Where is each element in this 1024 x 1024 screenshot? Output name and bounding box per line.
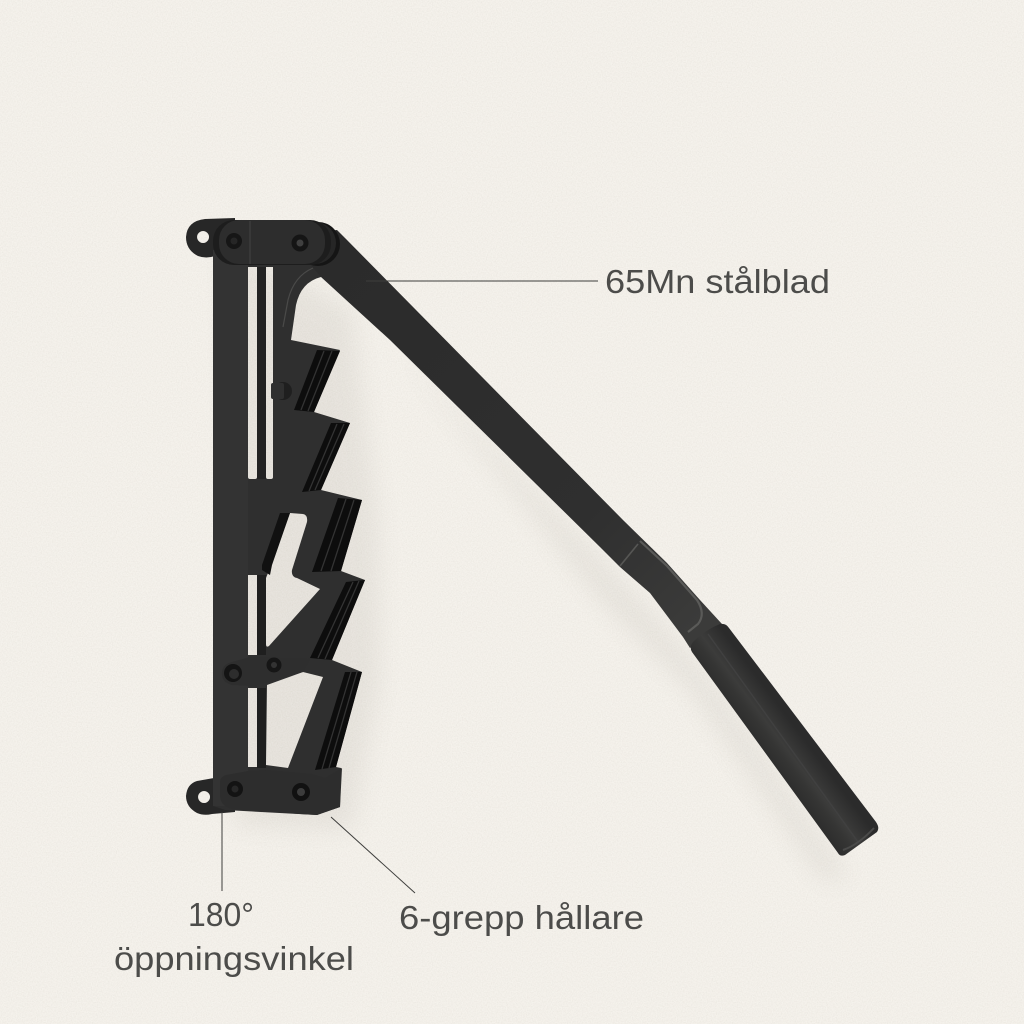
bolt: bottom right: [292, 783, 310, 801]
mounting ear: top: [186, 218, 235, 258]
link plate: bottom: [220, 768, 342, 815]
callout line: 6-grip holder: [331, 817, 415, 893]
bolt: middle right: [266, 658, 282, 672]
bolt: top left: [226, 233, 242, 249]
label: opening angle: 180°: [188, 896, 254, 933]
wall shadow: [226, 240, 850, 880]
rail edge and hook flap: [213, 250, 290, 806]
blade highlight: [640, 541, 702, 632]
blade seam: [620, 544, 638, 566]
link plate: middle: [222, 657, 310, 686]
hook highlight: [283, 268, 313, 327]
wall mount tool: [186, 218, 878, 856]
mounting ear: bottom: [186, 776, 235, 815]
blade teeth edges: [294, 350, 365, 770]
callout line: opening angle: [221, 812, 223, 891]
stop peg: [271, 382, 292, 400]
hook and arm: handle blade: [308, 230, 722, 648]
link plate: top: [213, 220, 340, 266]
bolt: top right: [292, 234, 308, 252]
foam grip: [691, 624, 878, 856]
bolt: bottom left: [227, 781, 243, 797]
label: opening angle: [114, 896, 354, 977]
label: steel blade: 65Mn stålblad: [605, 263, 830, 300]
callout line: steel blade: [366, 280, 598, 282]
label: opening angle: öppningsvinkel: [114, 940, 354, 977]
bolt: middle pivot: [224, 664, 242, 682]
bracket body with serrated teeth: [213, 250, 365, 815]
label: 6-grip holder: 6-grepp hållare: [399, 899, 644, 936]
